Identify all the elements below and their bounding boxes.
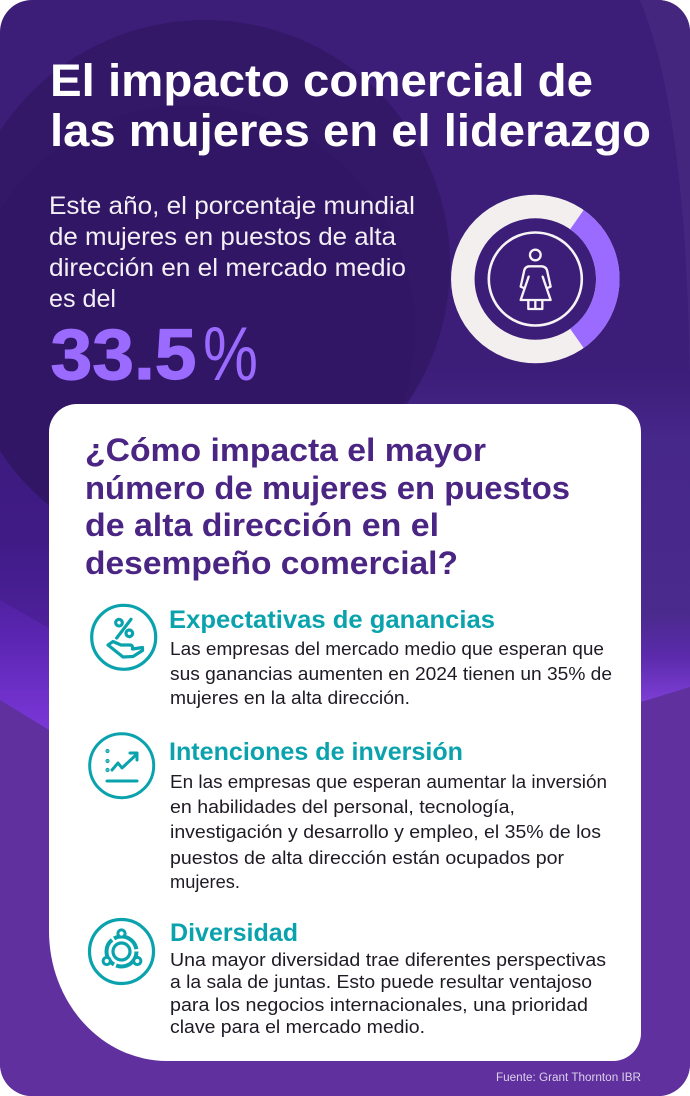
- card heading: ¿Cómo impacta el mayor: [85, 432, 486, 468]
- intro text: dirección en el mercado medio: [49, 254, 406, 282]
- intro text: Este año, el porcentaje mundial: [49, 192, 415, 220]
- title: El impacto comercial de: [50, 55, 593, 106]
- intro text: [49, 192, 415, 313]
- section: expectativas: Expectativas de ganancias: [169, 606, 495, 634]
- donut chart: [463, 206, 608, 352]
- section: inversion: Intenciones de inversión: [169, 738, 463, 766]
- icon: woman: [521, 250, 551, 309]
- section: diversidad: para los negocios internacionales, una prioridad: [170, 995, 588, 1015]
- source note: Fuente: Grant Thornton IBR: [496, 1072, 641, 1084]
- section: diversidad: clave para el mercado medio.: [170, 1017, 425, 1037]
- title: [50, 55, 651, 156]
- section: inversion: [169, 738, 607, 892]
- card heading: [85, 432, 570, 581]
- icon: percent in hand: [92, 605, 156, 669]
- card heading: número de mujeres en puestos: [85, 470, 570, 506]
- intro text: es del: [49, 285, 116, 313]
- section: inversion: mujeres.: [170, 872, 240, 892]
- section: inversion: investigación y desarrollo y empleo, el 35% de los: [170, 822, 601, 842]
- card heading: de alta dirección en el: [85, 507, 439, 543]
- section: expectativas: [169, 606, 612, 708]
- card heading: desempeño comercial?: [85, 545, 458, 581]
- icon: growth chart: [90, 734, 154, 798]
- section: inversion: en habilidades del personal, tecnología,: [170, 797, 515, 817]
- panel: white card: [49, 404, 641, 1061]
- section: diversidad: a la sala de juntas. Esto puede resultar ventajoso: [170, 972, 592, 992]
- section: expectativas: sus ganancias aumenten en 2024 tienen un 35% de: [170, 664, 612, 684]
- section: inversion: En las empresas que esperan aumentar la inversión: [170, 772, 607, 792]
- section: diversidad: Diversidad: [170, 919, 298, 947]
- statistic: 33.5%: %: [203, 312, 258, 397]
- section: expectativas: Las empresas del mercado medio que esperan que: [170, 639, 604, 659]
- section: expectativas: mujeres en la alta dirección.: [170, 688, 410, 708]
- section: diversidad: [170, 919, 606, 1037]
- statistic: 33.5%: [50, 312, 258, 397]
- intro text: de mujeres en puestos de alta: [49, 223, 396, 251]
- title: las mujeres en el liderazgo: [50, 105, 651, 156]
- statistic: 33.5%: 33.5: [50, 316, 196, 395]
- section: diversidad: Una mayor diversidad trae diferentes perspectivas: [170, 950, 606, 970]
- icon: diversity circle: [90, 920, 154, 984]
- section: inversion: puestos de alta dirección están ocupados por: [170, 848, 564, 868]
